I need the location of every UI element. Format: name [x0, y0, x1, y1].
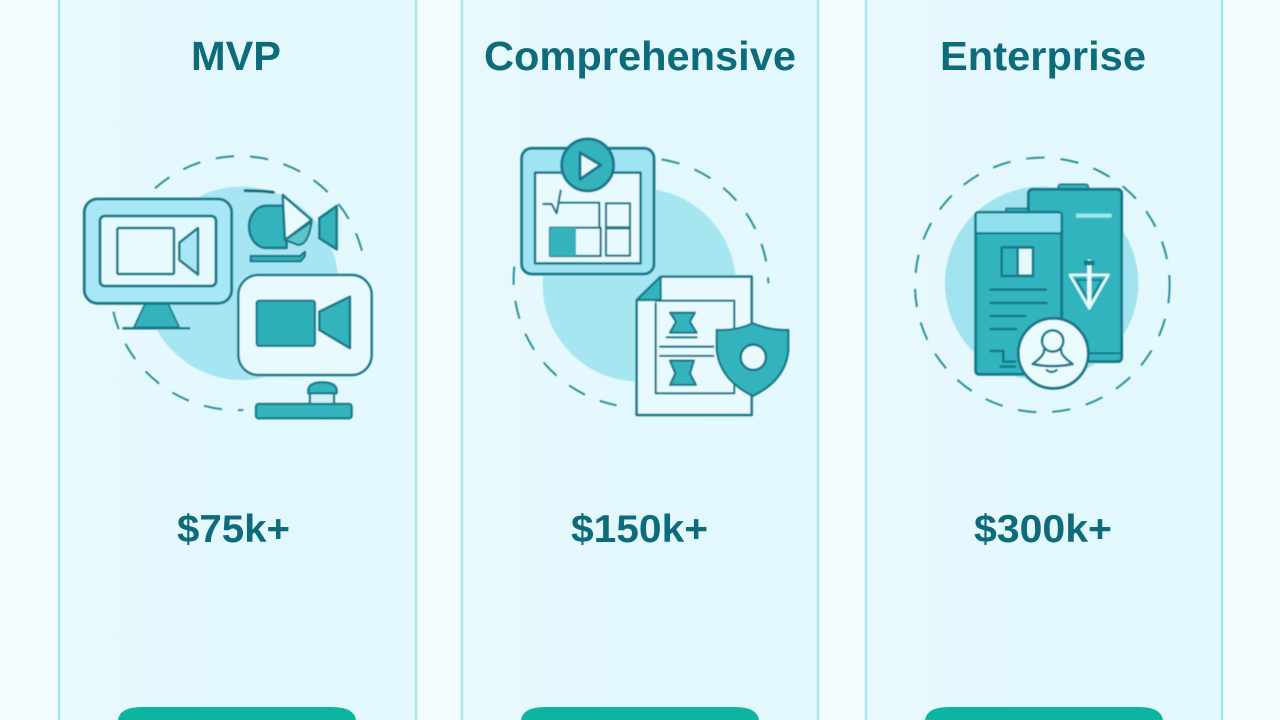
panel: MVP [59, 0, 416, 720]
price: $300k+: $300k+ [974, 508, 1112, 551]
icon: dashboard, document and shield [514, 139, 788, 415]
button [118, 707, 356, 720]
heading: Enterprise: Enterprise [940, 33, 1146, 79]
button [521, 707, 759, 720]
button [925, 707, 1163, 720]
price: $75k+: $75k+ [177, 508, 290, 551]
price: $150k+: $150k+ [571, 508, 708, 551]
panel: Enterprise [866, 0, 1222, 720]
icon: video cameras and monitor [84, 156, 372, 418]
icon: documents and user badge [915, 158, 1170, 412]
heading: Comprehensive: Comprehensive [484, 33, 796, 79]
heading: MVP: MVP [191, 33, 281, 79]
panel: Comprehensive [462, 0, 818, 720]
